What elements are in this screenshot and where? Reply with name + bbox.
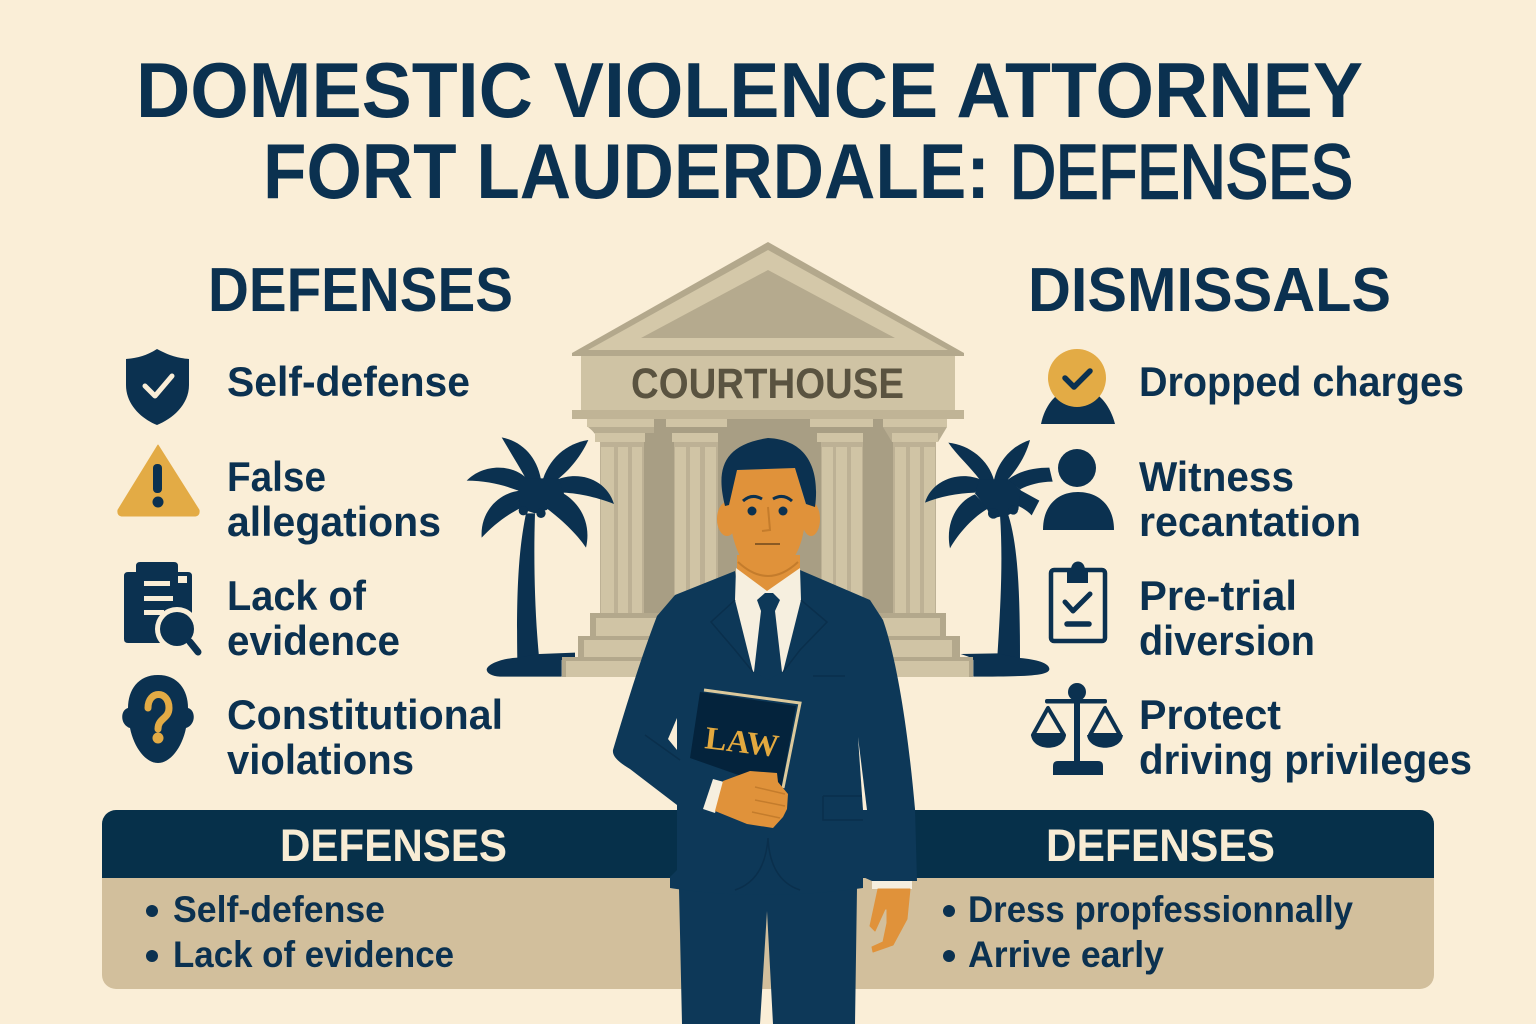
book label: LAW [703,719,781,764]
icon: shield [126,349,189,425]
banner heading: left: DEFENSES [280,820,507,871]
palm tree: right [925,440,1053,677]
item: lack of evidence: evidence [227,617,400,664]
item: protect driving privileges: Protect [1139,691,1281,738]
hair [721,438,816,507]
banner list: right: Dress propfessionnally [968,889,1353,930]
banner list: right [943,889,1353,975]
hand holding book [703,771,788,828]
item: witness recantation: Witness [1139,453,1294,500]
banner list: left: Lack of evidence [173,934,454,975]
item: witness recantation: recantation [1139,498,1361,545]
item: false allegations: False [227,453,326,500]
item: constitutional violations: Constitutional [227,691,503,738]
shirt [735,568,801,672]
item: lack of evidence [227,572,400,664]
title: DEFENSES [1010,130,1353,215]
title [136,46,1363,215]
pediment [572,242,964,356]
right hand [870,881,912,952]
item: false allegations [227,453,441,545]
face [728,468,806,574]
heading: dismissals: DISMISSALS [1028,256,1391,325]
item: pre-trial diversion: diversion [1139,617,1315,664]
item: false allegations: allegations [227,498,441,545]
icon: scales of justice [1031,683,1123,775]
item: self-defense: Self-defense [227,358,470,405]
title: DOMESTIC VIOLENCE ATTORNEY [136,46,1363,134]
entablature [581,356,955,410]
courthouse label: COURTHOUSE [631,360,904,408]
item: pre-trial diversion [1139,572,1315,664]
item: pre-trial diversion: Pre-trial [1139,572,1297,619]
banner list: left: Self-defense [173,889,385,930]
banner list: left [146,889,454,975]
tie [754,593,782,680]
courthouse steps [562,613,973,677]
defenses list [118,349,503,783]
item: lack of evidence: Lack of [227,572,367,619]
banner list: right: Arrive early [968,934,1164,975]
palm tree: left [467,437,614,677]
column 1 [587,419,654,614]
item: dropped charges: Dropped charges [1139,358,1464,405]
icon: document with magnifier [124,562,199,652]
icon: head with question mark [122,675,194,763]
item: constitutional violations: violations [227,736,414,783]
banner heading: right: DEFENSES [1046,820,1275,871]
attorney figure [613,438,917,1024]
item: protect driving privileges: driving privileges [1139,736,1472,783]
icon: clipboard [1051,562,1105,641]
pants [679,888,857,1024]
column 3 [810,419,873,614]
courthouse [572,242,964,640]
jacket details [645,600,863,890]
neck [737,555,800,592]
gaps beside torso [668,718,867,810]
icon: dropped charges [1041,349,1115,424]
icon: warning triangle [118,445,199,516]
ears [717,502,820,536]
column 2 [666,419,727,614]
facial features [738,496,798,576]
jacket [613,570,917,895]
bottom banner [102,810,1434,989]
heading: defenses: DEFENSES [208,256,513,325]
item: witness recantation [1139,453,1361,545]
title: FORT LAUDERDALE: [263,127,990,215]
item: protect driving privileges [1139,691,1472,783]
column 4 [883,419,947,614]
law book [690,690,800,790]
icon: witness person [1043,449,1114,530]
dismissals list [1031,349,1472,783]
item: constitutional violations [227,691,503,783]
columns backdrop [590,419,946,640]
